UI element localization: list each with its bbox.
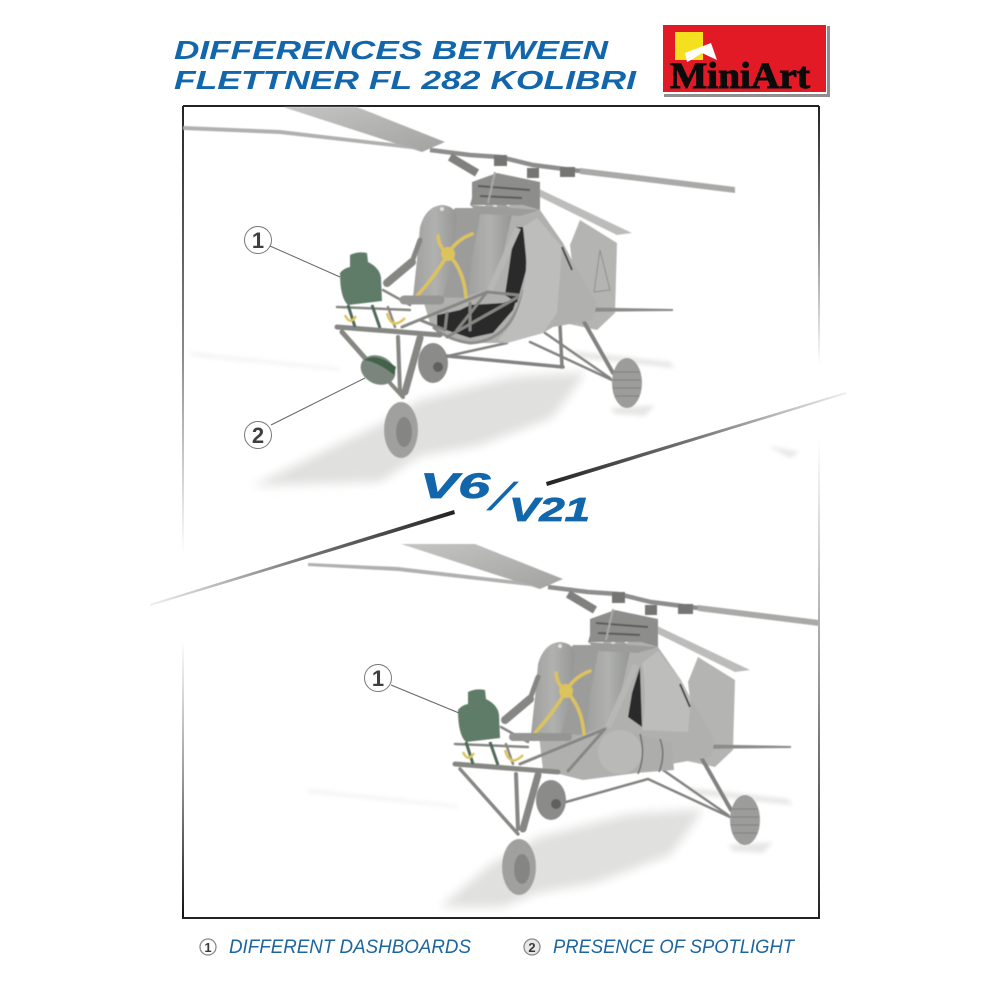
- fuselage: [420, 203, 597, 343]
- picture frame: [182, 106, 820, 918]
- tail fin and tailplane: [678, 657, 791, 767]
- variant heading: V6 / V21: V6: [420, 467, 491, 506]
- right tank: [468, 202, 512, 296]
- callout 1 (V21): [364, 664, 459, 713]
- wing strut: [490, 228, 518, 290]
- callout 1 (V6): [244, 226, 340, 277]
- legend item 1: DIFFERENT DASHBOARDS: [229, 936, 471, 958]
- cowling: [642, 651, 691, 732]
- logo: MiniArt: MiniArt: [670, 56, 811, 97]
- fuel tank: [598, 730, 674, 774]
- engine panel: [531, 645, 600, 735]
- dashboard (1): [458, 689, 523, 765]
- tank highlights: [440, 204, 497, 211]
- callout 2 (V6): [244, 378, 365, 448]
- nose wheel: [384, 402, 418, 458]
- rear nose wheel: [536, 780, 566, 820]
- wing strut: [608, 665, 636, 727]
- ground shadow: [190, 350, 800, 486]
- engine panel: [413, 208, 482, 298]
- rotor blades: [183, 107, 735, 235]
- cowling: [498, 218, 562, 343]
- variant heading: V6 / V21: V21: [509, 491, 590, 528]
- legend item 2: PRESENCE OF SPOTLIGHT: [553, 936, 796, 958]
- main wheel: [730, 795, 760, 845]
- callout 1 (V6): 1: [252, 228, 264, 253]
- callout 2 (V6): 2: [252, 423, 264, 448]
- gold harness: [417, 234, 472, 297]
- title: FLETTNER FL 282 KOLIBRI: [174, 65, 637, 95]
- rotor head: [430, 150, 580, 216]
- main gear struts: [447, 262, 613, 380]
- logo: MiniArt: [662, 23, 830, 97]
- dashboard (1): [340, 252, 405, 328]
- tail fin and tailplane: [560, 220, 673, 330]
- legend item 1: 1: [204, 940, 212, 955]
- title: [174, 35, 637, 95]
- nose wheel: [502, 839, 536, 895]
- right tank: [586, 639, 630, 733]
- rotor blades: [308, 544, 819, 672]
- main wheel: [612, 358, 642, 408]
- fuselage: [538, 640, 715, 780]
- helicopter V6: [183, 107, 800, 486]
- engine opening: [628, 667, 642, 727]
- main gear struts: [566, 720, 731, 817]
- helicopter V21: [308, 544, 819, 907]
- left tank: [413, 205, 457, 297]
- rotor head: [548, 587, 698, 653]
- callout 1 (V21): 1: [372, 666, 384, 691]
- nose frame: [337, 240, 518, 397]
- rear nose wheel: [418, 343, 448, 383]
- divider line: upper right: [546, 392, 846, 486]
- ground shadow: [308, 787, 793, 907]
- engine bay: [433, 227, 527, 343]
- nose frame: [455, 677, 605, 834]
- gold harness: [535, 671, 590, 734]
- legend item 2: 2: [528, 940, 536, 955]
- left tank: [531, 642, 575, 734]
- divider line: lower left: [150, 510, 455, 606]
- title: DIFFERENCES BETWEEN: [174, 35, 610, 65]
- variant heading: V6 / V21: [420, 467, 590, 528]
- tank highlights: [558, 641, 615, 648]
- spotlight (2): [356, 350, 400, 390]
